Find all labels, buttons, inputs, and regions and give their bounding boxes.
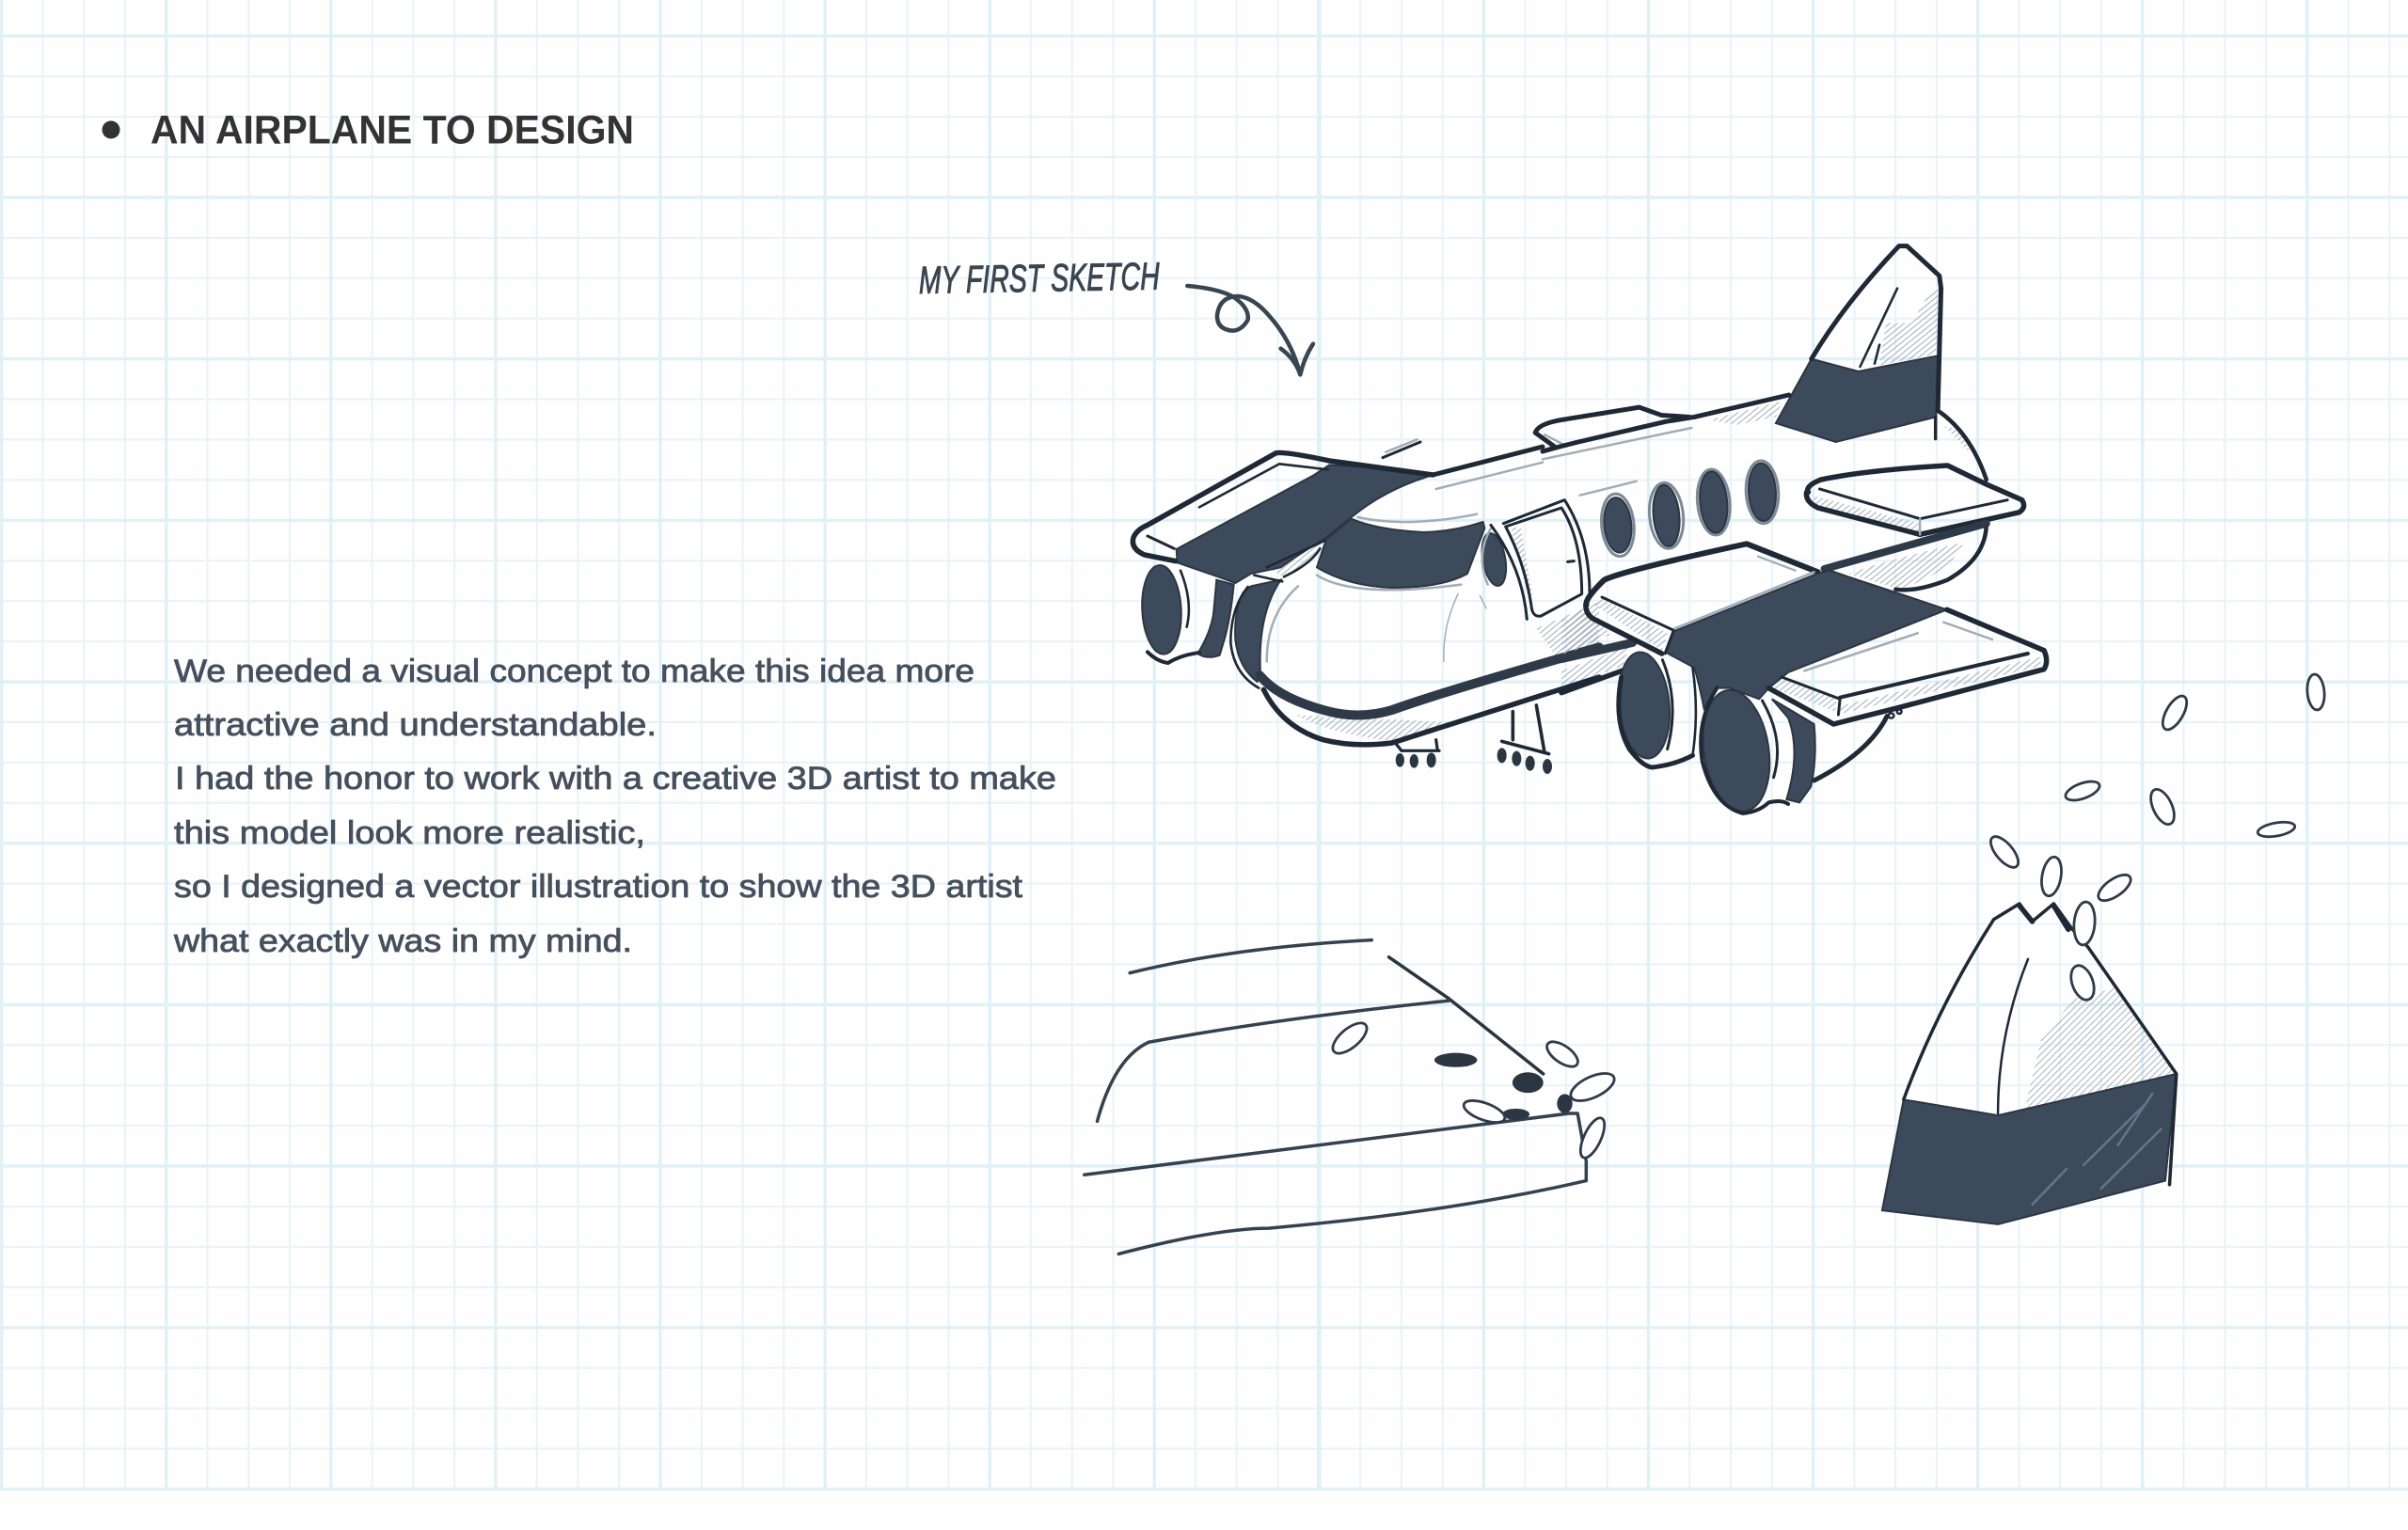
wing tip detail sketch [1085,940,1618,1254]
right wing outline [1586,605,1662,654]
body text block: attractive and understandable. [174,707,657,743]
left inner engine crescent [1235,580,1281,682]
fuselage top edge [1433,447,1543,475]
rear landing gear [1497,705,1552,774]
tail fin hatching [2022,987,2177,1119]
front landing gear [1395,740,1439,768]
rear fuselage bulge [1938,411,1987,480]
left outer engine intake [1140,564,1183,655]
body text block: this model look more realistic, [174,815,645,851]
airplane sketch [1133,246,2047,815]
wing tip seed shapes [1328,1017,1618,1161]
body text block: We needed a visual concept to make this idea more [174,654,974,689]
right wing rear outline [1586,544,1818,605]
right outer engine [1696,686,1902,815]
tail section and cabin windows [1543,246,2024,605]
near tail stabilizer [1806,465,2024,534]
flying seed shapes [1986,673,2326,1003]
door [1491,500,1590,619]
handwritten label: my first sketch: MY FIRST SKETCH [918,255,1160,302]
right wing and right engines [1561,571,2047,815]
heading: AN AIRPLANE TO DESIGN [150,107,634,152]
right wing dark band [1665,571,1947,708]
nose, left wing and left engine [1133,439,1599,774]
body text block: so I designed a vector illustration to show the 3D artist [174,869,1023,905]
far tail stabilizer [1535,407,1689,447]
arrow: curly arrow pointing at the sketch [1187,286,1313,374]
body text block: what exactly was in my mind. [173,923,632,959]
left wing outline [1133,452,1433,561]
tail fin detail sketch [1882,673,2326,1224]
left wing dark band [1177,465,1432,583]
vertical tail fin band [1776,355,1938,442]
body text block: I had the honor to work with a creative 3D artist to make [175,761,1056,797]
vertical tail fin outline [1812,246,1941,411]
right inner engine [1614,650,1696,767]
body text block [173,654,1056,959]
cockpit windshield [1317,519,1484,588]
cabin windows [1599,460,1780,558]
fuselage belly stripe [1259,647,1599,715]
side window [1479,531,1510,588]
